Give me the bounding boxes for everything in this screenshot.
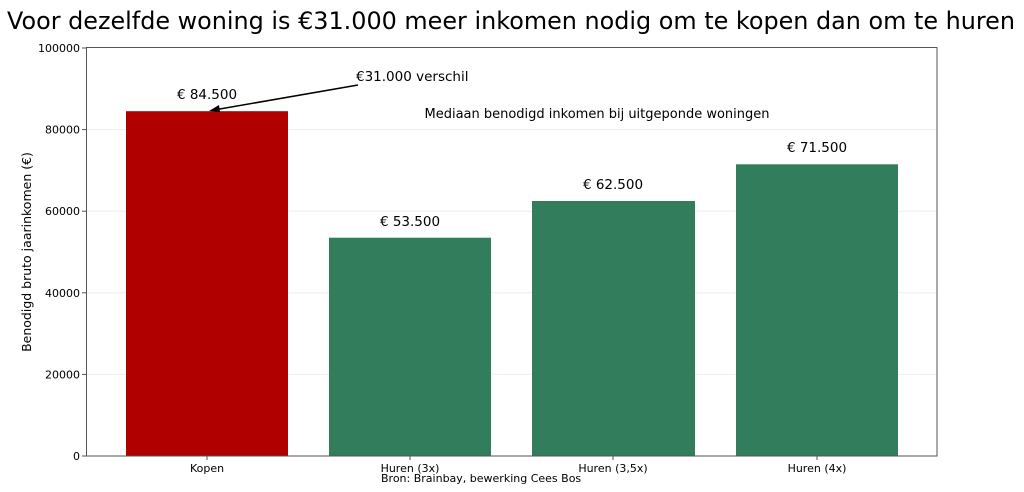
y tick labels: 80000 <box>45 124 80 137</box>
y axis label: Benodigd bruto jaarinkomen (€) <box>19 152 34 352</box>
value labels: € 84.500 <box>177 87 237 103</box>
x tick labels: Huren (3x) <box>381 462 439 475</box>
y tick labels: 60000 <box>45 205 80 218</box>
axes frame <box>86 48 937 456</box>
y tick labels: 0 <box>73 450 80 463</box>
bar: Huren (3,5x) <box>532 201 695 456</box>
value labels <box>177 87 847 230</box>
bar: Kopen <box>126 111 288 456</box>
x tick labels: Huren (4x) <box>788 462 846 475</box>
y tick labels: 40000 <box>45 287 80 300</box>
value labels: € 62.500 <box>583 177 643 193</box>
chart subtitle: Mediaan benodigd inkomen bij uitgeponde woningen <box>424 107 770 122</box>
bar: Huren (3x) <box>329 238 491 456</box>
x tick labels <box>190 462 846 475</box>
y tick labels <box>38 42 80 463</box>
chart: bar chart <box>19 42 937 475</box>
callout arrow: €31.000 verschil <box>356 69 468 85</box>
value labels: € 53.500 <box>380 214 440 230</box>
y tick labels: 20000 <box>45 368 80 381</box>
title: Voor dezelfde woning is €31.000 meer inkomen nodig om te kopen dan om te huren <box>7 7 1015 35</box>
x tick labels: Huren (3,5x) <box>578 462 648 475</box>
bar: Huren (4x) <box>736 164 898 456</box>
x tick labels: Kopen <box>190 462 224 475</box>
callout arrow <box>209 69 468 112</box>
source note: Bron: Brainbay, bewerking Cees Bos <box>381 472 581 485</box>
y tick labels: 100000 <box>38 42 80 55</box>
value labels: € 71.500 <box>787 140 847 156</box>
